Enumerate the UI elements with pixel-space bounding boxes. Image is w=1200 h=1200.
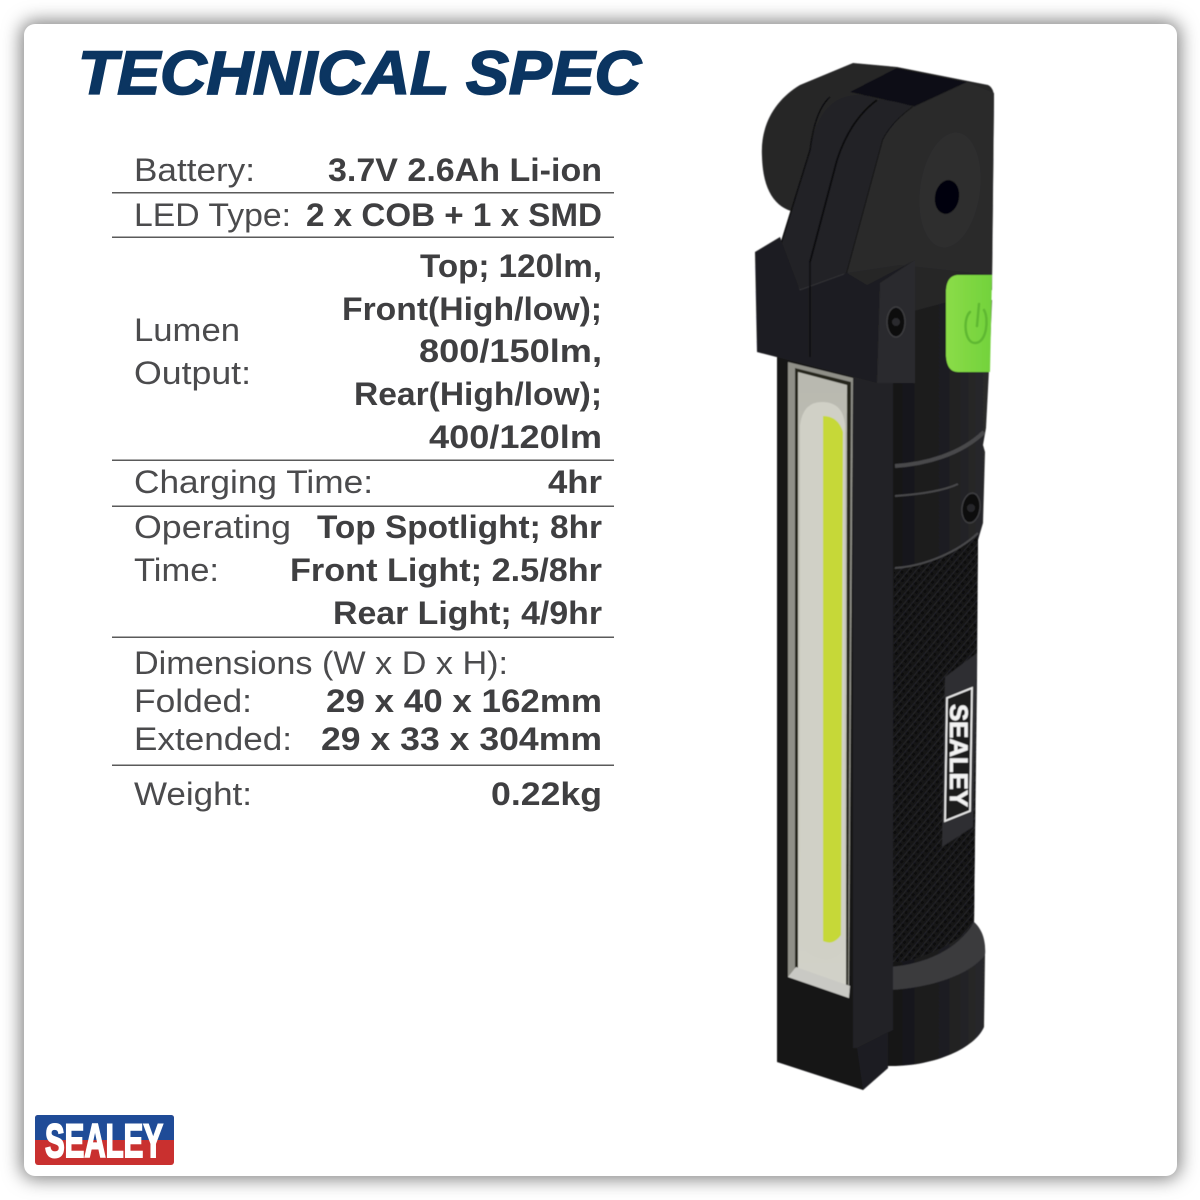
- logo: Sealey: SEALEY: [45, 1114, 163, 1167]
- head: side plate: [847, 82, 994, 275]
- row: LED type: 2 x COB + 1 x SMD: [306, 197, 602, 233]
- row: lumen output: Rear(High/low);: [354, 376, 602, 412]
- row: lumen output: Lumen: [134, 312, 240, 348]
- badge with brand: SEALEY: [944, 704, 972, 807]
- row: operating time: Operating: [134, 509, 291, 545]
- head: rear pivot and shell: [762, 63, 994, 320]
- spec table: [112, 152, 614, 812]
- head: hinge arms: [780, 95, 913, 290]
- row: operating time: Rear Light; 4/9hr: [333, 595, 602, 631]
- row: dimensions: 29 x 40 x 162mm: [326, 683, 602, 719]
- lens clip: [788, 967, 850, 998]
- head block: [755, 237, 915, 383]
- row: operating time: Time:: [134, 552, 219, 588]
- row: weight: Weight:: [134, 776, 252, 812]
- row: battery: Battery:: [134, 152, 255, 188]
- row: lumen output: [134, 248, 602, 455]
- row: charging time: 4hr: [548, 464, 602, 500]
- row: lumen output: 800/150lm,: [419, 333, 602, 369]
- row: lumen output: Top; 120lm,: [420, 248, 602, 284]
- product photo: inspection light: [755, 63, 994, 1090]
- block screw: [887, 307, 905, 337]
- row: dimensions: Extended:: [134, 721, 292, 757]
- green power button: [946, 275, 992, 372]
- row: battery: 3.7V 2.6Ah Li-ion: [328, 152, 602, 188]
- title: TECHNICAL SPEC: [78, 39, 642, 107]
- row: battery: [134, 152, 602, 188]
- row: operating time: [134, 509, 602, 631]
- row: charging time: Charging Time:: [134, 464, 373, 500]
- badge with brand: [942, 653, 977, 847]
- handle body: [880, 300, 992, 1066]
- mount hole: [932, 178, 962, 216]
- capsule highlight: [800, 402, 845, 960]
- row: dimensions: 29 x 33 x 304mm: [321, 721, 602, 757]
- row: dimensions: Folded:: [134, 683, 252, 719]
- row: dimensions: [134, 645, 602, 757]
- row: weight: [134, 776, 602, 812]
- row: lumen output: Front(High/low);: [342, 291, 602, 327]
- row: LED type: [134, 197, 602, 233]
- row: operating time: Top Spotlight; 8hr: [317, 509, 602, 545]
- side screw: [960, 492, 982, 524]
- front bar: [777, 350, 893, 1090]
- head: top opening: [850, 68, 967, 107]
- row: lumen output: 400/120lm: [429, 419, 602, 455]
- grip rings: [895, 432, 984, 568]
- row: charging time: [134, 464, 602, 500]
- yellow LED strip: [823, 416, 843, 943]
- row: weight: 0.22kg: [491, 776, 602, 812]
- base collar: [890, 922, 985, 990]
- row: LED type: LED Type:: [134, 197, 291, 233]
- logo: Sealey: [35, 1114, 174, 1167]
- COB light panel: [788, 362, 853, 998]
- knurled grip: [892, 533, 978, 964]
- row: lumen output: Output:: [134, 355, 251, 391]
- row: operating time: Front Light; 2.5/8hr: [290, 552, 602, 588]
- row: dimensions: Dimensions (W x D x H):: [134, 645, 508, 681]
- power symbol: [966, 304, 987, 343]
